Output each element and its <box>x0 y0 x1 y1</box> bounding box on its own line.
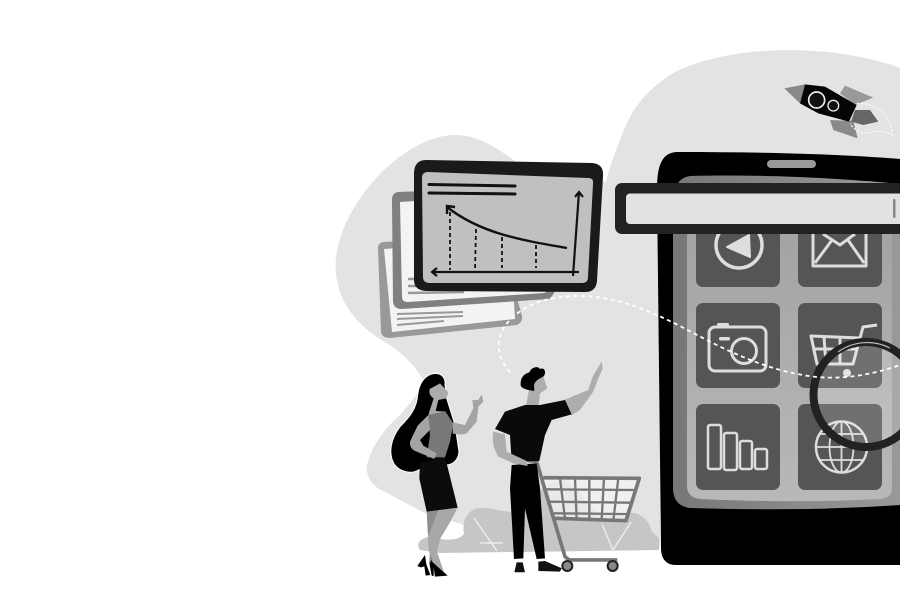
back card lower <box>378 235 522 338</box>
app tile: mail <box>798 205 882 287</box>
phone body <box>657 152 900 565</box>
man neck and face <box>526 377 547 406</box>
dashed path <box>499 296 900 378</box>
phone speaker <box>767 160 816 168</box>
rocket <box>784 84 892 138</box>
woman front leg <box>428 508 458 573</box>
woman face <box>428 383 448 415</box>
back card upper <box>392 190 556 309</box>
rocket trail <box>850 103 892 135</box>
chart drop lines <box>450 212 536 270</box>
woman <box>391 373 483 577</box>
woman arms <box>410 394 483 459</box>
app tile: globe <box>798 404 882 490</box>
chart axes <box>432 192 583 276</box>
screen rim <box>673 175 900 509</box>
app tile: camera <box>696 303 780 388</box>
man shoes <box>514 561 562 572</box>
phone <box>657 152 900 565</box>
app tile: play <box>696 205 780 287</box>
tablet header lines <box>429 184 515 194</box>
woman back leg <box>427 509 441 565</box>
magnifier <box>814 342 900 447</box>
man shirt <box>495 400 572 462</box>
rocket nose <box>784 84 805 103</box>
app tile: cart <box>798 303 882 388</box>
screen inner <box>687 190 892 501</box>
woman hair <box>391 373 459 472</box>
man raised arm <box>564 362 603 415</box>
rocket windows <box>809 92 825 108</box>
woman skirt <box>419 457 458 512</box>
man trousers <box>510 463 545 559</box>
man <box>493 362 603 572</box>
app tile: bars <box>696 404 780 490</box>
background blob <box>336 50 900 548</box>
woman top <box>427 411 453 457</box>
plants behind figures <box>418 480 659 553</box>
chart curve <box>447 206 567 248</box>
man lower arm <box>493 432 528 466</box>
tablet chart <box>414 160 603 292</box>
man hair <box>521 367 545 391</box>
search bar <box>615 183 900 234</box>
woman shoes <box>417 555 430 576</box>
rocket body <box>800 84 857 122</box>
rocket fins <box>840 86 873 105</box>
shopping cart <box>513 458 639 571</box>
tablet screen <box>422 172 593 283</box>
